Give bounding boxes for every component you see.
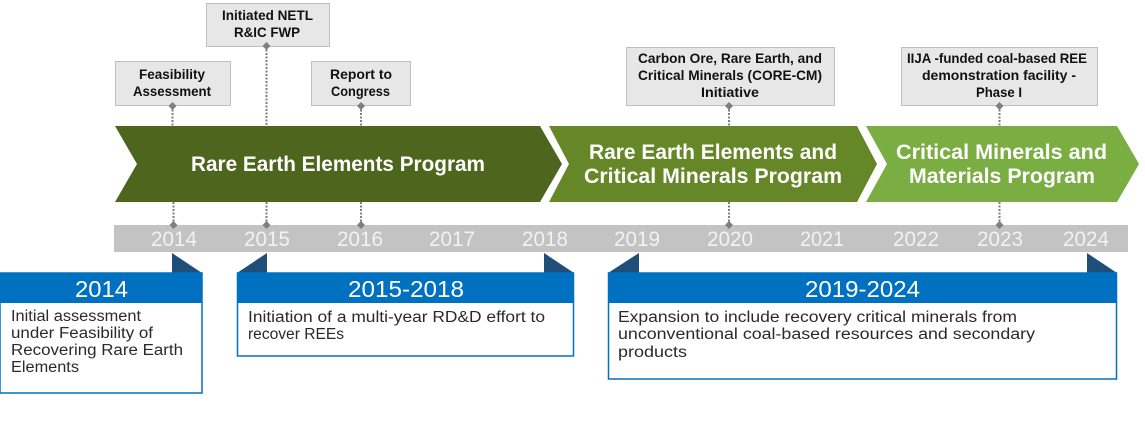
callout: Initiated NETL R&IC FWP: R&IC FWP [234,24,300,40]
panel: 2019-2024: 2019-2024 [805,276,920,302]
year labels: 2015 [244,228,290,251]
panel: 2014: 2014 [75,276,128,302]
year labels: 2017 [429,228,475,251]
callout: Feasibility Assessment [116,62,230,106]
chevron: Rare Earth Elements and Critical Minerals Program: Critical Minerals Program [584,165,842,188]
panel: 2019-2024: products [618,344,687,361]
connector: Initiated NETL [262,42,270,229]
chevron: Rare Earth Elements Program: Rare Earth Elements Program [191,153,485,176]
callout: CORE-CM Initiative: Initiative [701,84,759,100]
chevron: Rare Earth Elements Program [115,126,562,202]
callout: Initiated NETL R&IC FWP [206,4,330,46]
year labels [151,228,1109,251]
callout: Feasibility Assessment: Feasibility [139,66,205,82]
callout: Report to Congress: Report to [330,66,392,82]
panel: 2014: Initial assessment [11,308,142,325]
chevron: Critical Minerals and Materials Program: Critical Minerals and [896,141,1107,164]
year labels: 2014 [151,228,197,251]
panel: 2014: Recovering Rare Earth [11,342,183,359]
year labels: 2023 [977,228,1023,251]
connector: CORE-CM [725,102,733,229]
year labels: 2016 [337,228,383,251]
panel: 2019-2024: Expansion to include recovery critical minerals from [618,309,1017,326]
connector: Feasibility Assessment [168,102,178,229]
callout: IIJA demonstration facility [902,48,1098,106]
callout: Report to Congress [312,62,410,106]
year labels: 2024 [1063,228,1109,251]
chevron: Rare Earth Elements and Critical Minerals Program [549,126,877,202]
chevron: Critical Minerals and Materials Program: Materials Program [909,165,1095,188]
callout: IIJA demonstration facility: Phase I [976,84,1022,100]
year labels: 2019 [614,228,660,251]
panel: 2019-2024 [608,253,1117,379]
panel: 2015-2018: Initiation of a multi-year RD&D effort to [248,309,545,326]
callout: IIJA demonstration facility: demonstration facility - [922,67,1076,83]
panel: 2014: Elements [11,359,79,376]
callout: CORE-CM Initiative [626,48,834,106]
callout: IIJA demonstration facility: IIJA -funded coal-based REE [907,50,1087,66]
connector: IIJA [996,102,1004,229]
panel: 2015-2018: recover REEs [248,326,344,343]
panel: 2014: under Feasibility of [11,325,154,342]
panel: 2014 [0,253,202,393]
callout: Feasibility Assessment: Assessment [133,83,211,99]
connector: Report to Congress [357,102,365,229]
panel: 2015-2018 [237,253,574,356]
year labels: 2018 [522,228,568,251]
chevron: Critical Minerals and Materials Program [866,126,1139,202]
callout: Initiated NETL R&IC FWP: Initiated NETL [222,7,313,23]
callout: Report to Congress: Congress [331,83,390,99]
callout: CORE-CM Initiative: Critical Minerals (CORE-CM) [638,67,822,83]
year axis bar [114,225,1128,252]
chevron: Rare Earth Elements and Critical Minerals Program: Rare Earth Elements and [589,141,837,164]
year labels: 2020 [707,228,753,251]
callout: CORE-CM Initiative: Carbon Ore, Rare Earth, and [638,50,822,66]
panel: 2019-2024: unconventional coal-based resources and secondary [618,326,1035,343]
year labels: 2022 [893,228,939,251]
panel: 2015-2018: 2015-2018 [348,276,464,302]
year labels: 2021 [800,228,844,251]
